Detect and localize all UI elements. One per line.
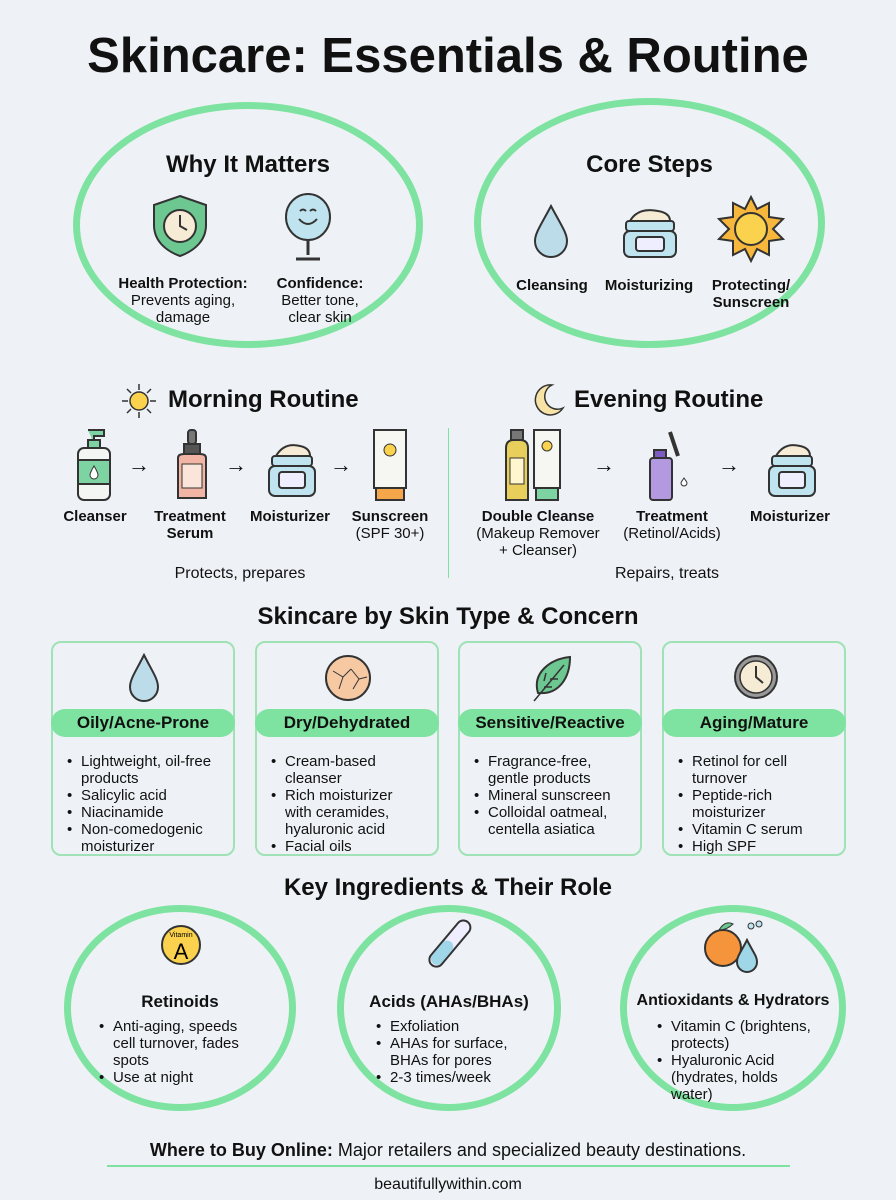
icon: sun: [717, 195, 785, 263]
card: dry: [255, 641, 439, 856]
card: sensitive: Mineral sunscreen: [488, 787, 611, 804]
evening labels: [476, 508, 600, 559]
text: Moisturizer: [250, 508, 330, 525]
panel: core steps: Moisturizing: [605, 277, 693, 294]
card: sensitive: gentle products: [488, 770, 591, 787]
text: Moisturizer: [750, 508, 830, 525]
circle: acids: 2-3 times/week: [390, 1069, 491, 1086]
card: aging: [662, 641, 846, 856]
circle: antioxidants: protects): [671, 1035, 729, 1052]
arrow: →: [593, 452, 615, 477]
circle: retinoids: Anti-aging, speeds: [113, 1018, 237, 1035]
icon: test tube: [428, 920, 472, 968]
circle: antioxidants: (hydrates, holds: [671, 1069, 778, 1086]
circle: acids: Exfoliation: [390, 1018, 459, 1035]
circle: retinoids: [64, 905, 296, 1111]
card: dry: Dry/Dehydrated: [284, 713, 410, 732]
morning icons: [77, 429, 407, 501]
card: aging: Peptide-rich: [692, 787, 772, 804]
card: aging: moisturizer: [692, 804, 765, 821]
icon: drop: [534, 204, 568, 258]
card: sensitive: centella asiatica: [488, 821, 595, 838]
icon: clock: [734, 655, 778, 699]
circle: antioxidants: [620, 905, 846, 1111]
card: oily: Lightweight, oil-free: [81, 753, 211, 770]
card: aging: Vitamin C serum: [692, 821, 803, 838]
text: health protection: [118, 275, 248, 326]
labels: core steps: Cleansing: [516, 277, 588, 294]
heading: morning routine: [122, 384, 359, 418]
circle: acids: AHAs for surface,: [390, 1035, 508, 1052]
card: sensitive: [458, 641, 642, 856]
card: dry: Facial oils: [285, 838, 352, 855]
card: sensitive: Colloidal oatmeal,: [488, 804, 607, 821]
heading: key ingredients: Key Ingredients & Their Role: [284, 874, 612, 901]
icon: sunscreen tube: [373, 429, 407, 501]
text: (Retinol/Acids): [623, 525, 721, 542]
circle: acids: [337, 905, 561, 1111]
text: (SPF 30+): [356, 525, 424, 542]
heading: evening routine: [534, 384, 763, 416]
icon: moisturizer jar: [268, 444, 316, 497]
heading: skin type: Skincare by Skin Type & Concern: [257, 603, 638, 630]
card: sensitive: Fragrance-free,: [488, 753, 591, 770]
heading: core steps: Core Steps: [586, 151, 713, 178]
text: confidence: clear skin: [288, 309, 352, 326]
card: aging: Aging/Mature: [700, 713, 808, 732]
card: oily: products: [81, 770, 139, 787]
arrow: →: [718, 452, 740, 477]
card: sensitive: Sensitive/Reactive: [475, 713, 625, 732]
circle: antioxidants: water): [671, 1086, 713, 1103]
card: dry: hyaluronic acid: [285, 821, 385, 838]
icon: drop: [129, 653, 159, 702]
text: confidence: Confidence:: [277, 275, 363, 292]
text: Sunscreen: [352, 508, 428, 525]
heading: evening routine: Evening Routine: [574, 386, 763, 413]
text: Serum: [167, 525, 213, 542]
panel: why it matters: [73, 102, 423, 348]
text: health protection: damage: [156, 309, 210, 326]
icon: serum dropper: [177, 429, 207, 499]
circle: acids: Acids (AHAs/BHAs): [369, 992, 529, 1011]
icon: cracked skin: [325, 655, 371, 701]
icon: mirror: [285, 193, 331, 260]
footer: where to buy: Where to Buy Online: Major retailers and specialized beauty destinations.: [150, 1140, 746, 1160]
circle: antioxidants: Hyaluronic Acid: [671, 1052, 774, 1069]
morning labels: Cleanser: [63, 508, 127, 525]
card: dry: Cream-based: [285, 753, 376, 770]
arrow: →: [330, 452, 352, 477]
evening labels: (Makeup Remover: [476, 525, 600, 542]
icon: vitamin A: [161, 925, 201, 965]
text: health protection: Prevents aging,: [131, 292, 235, 309]
card: oily: Non-comedogenic: [81, 821, 203, 838]
circle: antioxidants: Vitamin C (brightens,: [671, 1018, 811, 1035]
card: oily: Niacinamide: [81, 804, 164, 821]
icon: cleanser pump: [77, 429, 111, 501]
card: dry: cleanser: [285, 770, 342, 787]
title: Skincare: Essentials & Routine: [87, 29, 809, 83]
evening icons: [505, 429, 816, 501]
circle: retinoids: Use at night: [113, 1069, 193, 1086]
icon: moon: [534, 384, 565, 416]
icon: vitamin A: A: [174, 939, 189, 964]
circle: retinoids: spots: [113, 1052, 149, 1069]
text: Treatment: [154, 508, 226, 525]
divider: [448, 428, 449, 578]
card: oily: Salicylic acid: [81, 787, 167, 804]
text: protects: Protects, prepares: [175, 565, 305, 582]
card: aging: High SPF: [692, 838, 756, 855]
card: aging: Retinol for cell: [692, 753, 787, 770]
icon: double cleanse: [505, 429, 561, 501]
panel: core steps: Protecting/: [712, 277, 790, 294]
icon: leaf: [534, 656, 571, 702]
arrow: →: [128, 452, 150, 477]
icon: retinol dropper: [649, 431, 688, 501]
card: aging: turnover: [692, 770, 747, 787]
panel: core steps: [474, 98, 825, 348]
text: confidence: Better tone,: [281, 292, 359, 309]
icon: orange and drop: [704, 920, 762, 973]
circle: retinoids: Retinoids: [141, 992, 219, 1011]
icon: vitamin A: Vitamin: [169, 932, 193, 939]
text: confidence: [277, 275, 363, 326]
card: oily: moisturizer: [81, 838, 154, 855]
evening labels: + Cleanser): [499, 542, 577, 559]
icon: jar: [623, 209, 677, 258]
icon: shield clock: [153, 195, 207, 257]
heading: morning routine: Morning Routine: [168, 386, 359, 413]
text: repairs: Repairs, treats: [615, 565, 719, 582]
footer: url: beautifullywithin.com: [374, 1176, 522, 1193]
card: oily: Oily/Acne-Prone: [77, 713, 209, 732]
icon: small sun: [122, 384, 156, 418]
evening labels: Double Cleanse: [482, 508, 594, 525]
circle: antioxidants: Antioxidants & Hydrators: [637, 992, 829, 1009]
icon: jar: [768, 444, 816, 497]
card: dry: Rich moisturizer: [285, 787, 393, 804]
card: oily: [51, 641, 235, 856]
circle: acids: BHAs for pores: [390, 1052, 492, 1069]
text: health protection: Health Protection:: [118, 275, 248, 292]
text: Treatment: [636, 508, 708, 525]
panel: core steps: Sunscreen: [713, 294, 789, 311]
arrow: →: [225, 452, 247, 477]
card: dry: with ceramides,: [285, 804, 389, 821]
circle: retinoids: cell turnover, fades: [113, 1035, 239, 1052]
heading: why it matters: Why It Matters: [166, 151, 330, 178]
